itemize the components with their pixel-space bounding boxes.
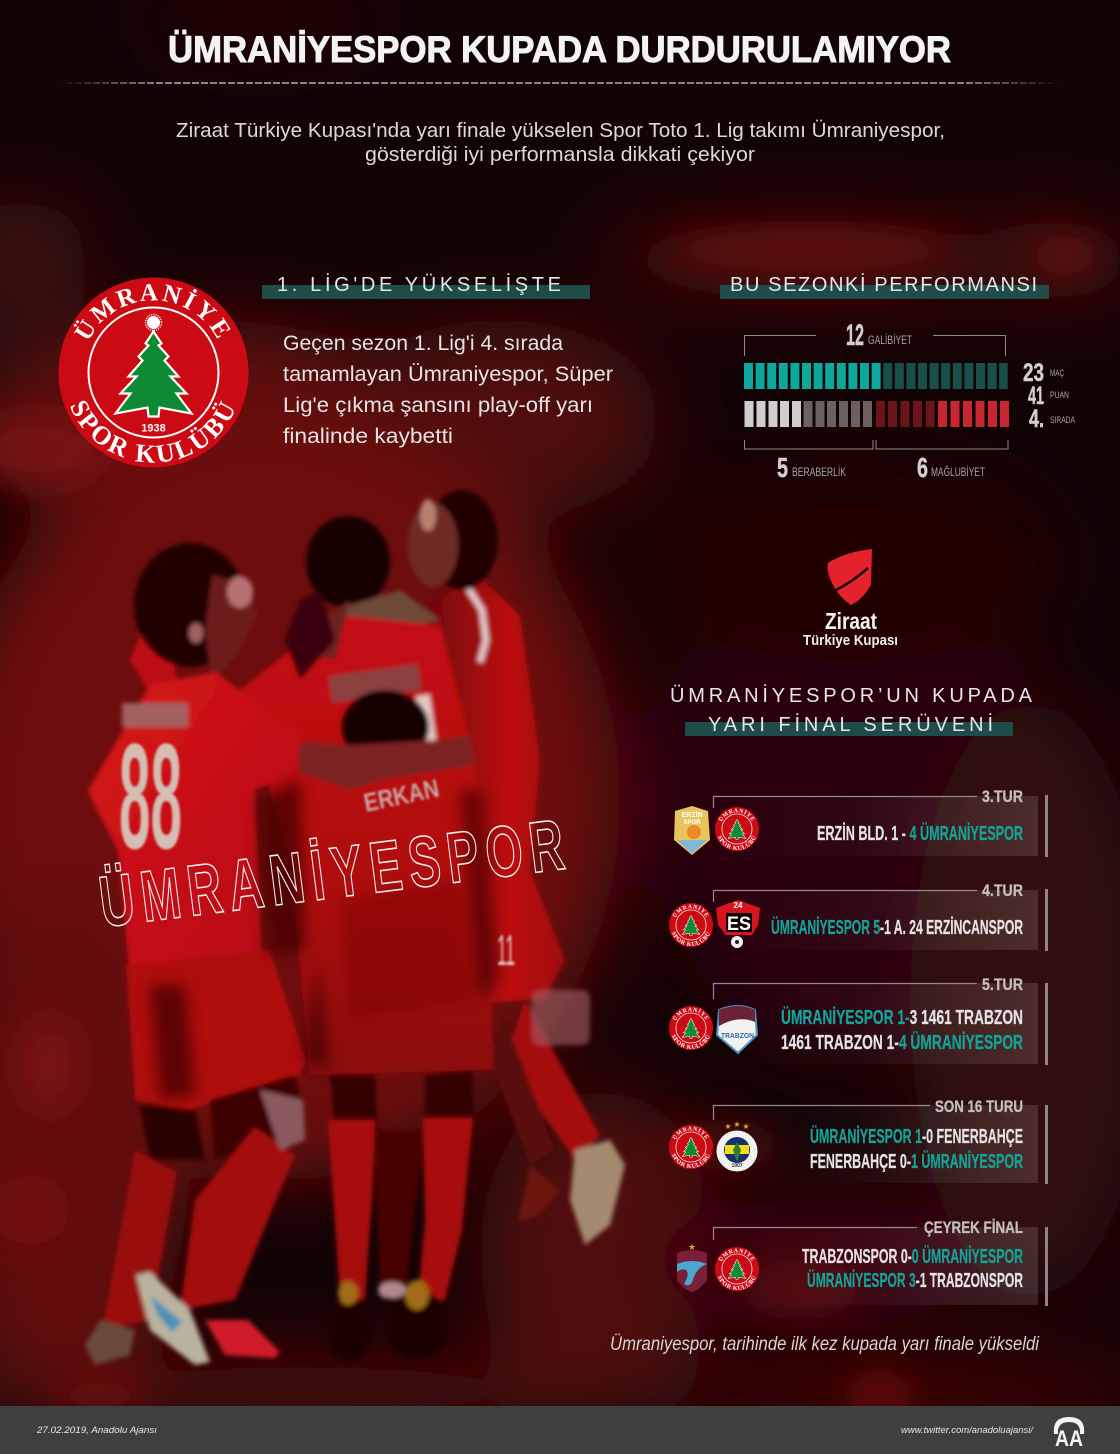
- totals: [1023, 359, 1075, 433]
- icon: Ümraniye crest: ÜMRANİYE: [718, 1248, 755, 1262]
- body text: finalinde kaybetti: [283, 425, 453, 448]
- panel: Son 16 Turu: [669, 1097, 1048, 1184]
- icon: Fenerbahçe crest: [716, 1120, 758, 1172]
- icon: Erzin Spor crest: ERZİN: [682, 811, 702, 819]
- right player: [408, 490, 625, 1245]
- icon: 1461 Trabzon crest: [717, 1006, 757, 1053]
- logo: Ziraat Türkiye Kupası: [803, 549, 898, 649]
- label: 6 losses: MAĞLUBİYET: [931, 464, 985, 479]
- section: season performance: BU SEZONKİ PERFORMANSI: [730, 273, 1037, 296]
- footer: [0, 1406, 1120, 1454]
- body text: [283, 332, 613, 448]
- icon: Ümraniye crest: [669, 1125, 713, 1169]
- intro text: [176, 120, 945, 166]
- section heading: cup journey: YARI FİNAL SERÜVENİ: [708, 713, 993, 736]
- scores: [781, 1006, 1023, 1054]
- scores: ÜMRANİYESPOR 1-3 1461 TRABZON: [781, 1006, 1023, 1029]
- bars: results: [744, 401, 1009, 427]
- icon: Fenerbahçe crest: 1907: [731, 1163, 743, 1169]
- totals: 41: [1028, 382, 1044, 410]
- icon: Ümraniye crest: ÜMRANİYE: [672, 1008, 709, 1020]
- icon: Ümraniye crest: ÜMRANİYE: [672, 1126, 709, 1140]
- scores: TRABZONSPOR 0-0 ÜMRANİYESPOR: [802, 1245, 1023, 1268]
- icon: Ümraniye crest: ÜMRANİYE: [672, 904, 709, 918]
- score: ERZİN BLD. 1 - 4 ÜMRANİYESPOR: [817, 822, 1023, 845]
- section heading: cup journey: ÜMRANİYESPOR’UN KUPADA: [670, 684, 1033, 707]
- scores: [802, 1245, 1023, 1292]
- icon: Ümraniye crest: SPOR KULÜBÜ: [672, 1154, 710, 1168]
- icon: stars: ★: [724, 1122, 732, 1131]
- bracket: wins: [744, 336, 1006, 356]
- label: 12 wins: 12: [846, 319, 864, 352]
- totals: MAÇ: [1050, 368, 1064, 378]
- heading bar: [262, 285, 590, 299]
- panel: 3. Tur: 3.TUR: [982, 787, 1023, 806]
- icon: Ümraniye crest: SPOR KULÜBÜ: [718, 1276, 756, 1290]
- photo: players celebrating: 11: [497, 926, 515, 975]
- outlined team name: ÜMRANİYESPOR: [95, 804, 569, 942]
- icon: Anadolu Ajansı logo: AA: [1055, 1426, 1083, 1451]
- score: ÜMRANİYESPOR 5-1 A. 24 ERZİNCANSPOR: [771, 916, 1023, 939]
- icon: 24 Erzincanspor crest: [716, 900, 760, 948]
- body text: tamamlayan Ümraniyespor, Süper: [283, 363, 613, 386]
- icon: 24 Erzincanspor crest: 24: [734, 901, 743, 910]
- icon: Ümraniye crest: SPOR KULÜBÜ: [672, 1034, 710, 1049]
- icon: Ümraniye crest: [715, 807, 759, 851]
- scores: ÜMRANİYESPOR 3-1 TRABZONSPOR: [807, 1269, 1023, 1292]
- totals: SIRADA: [1050, 415, 1075, 425]
- intro text: gösterdiği iyi performansla dikkati çekiyor: [365, 144, 755, 166]
- scores: [810, 1125, 1023, 1173]
- section heading: cup journey: [670, 684, 1033, 736]
- section: 1. Lig'de yükselişte: [262, 273, 613, 448]
- body text: Geçen sezon 1. Lig'i 4. sırada: [283, 332, 563, 355]
- panel: Çeyrek Final: ÇEYREK FİNAL: [924, 1218, 1023, 1237]
- icon: Ümraniye crest: [669, 903, 713, 947]
- intro text: Ziraat Türkiye Kupası'nda yarı finale yükselen Spor Toto 1. Lig takımı Ümraniyespor,: [176, 120, 945, 142]
- club logo: Ümraniye: ÜMRANİYE: [74, 284, 230, 338]
- panel: 3. Tur: [674, 787, 1048, 857]
- scores: 1461 TRABZON 1-4 ÜMRANİYESPOR: [781, 1031, 1023, 1054]
- bracket: draws and losses: [744, 440, 1008, 449]
- icon: stars: [724, 1120, 750, 1131]
- panel: 5. Tur: 5.TUR: [982, 975, 1023, 994]
- shirt name: ERKAN: [361, 773, 442, 818]
- middle player: [240, 516, 493, 1362]
- panel: Son 16 Turu: SON 16 TURU: [935, 1097, 1023, 1116]
- icon: 1461 Trabzon crest: TRABZON: [721, 1033, 754, 1040]
- label: 5 draws: 5: [777, 452, 788, 483]
- footer: 27.02.2019, Anadolu Ajansı: [36, 1425, 157, 1436]
- icon: Trabzonspor crest: ★: [688, 1242, 696, 1252]
- icon: Anadolu Ajansı logo: [1054, 1417, 1084, 1451]
- section: 1. Lig'de yükselişte: 1. LİG'DE YÜKSELİŞTE: [277, 273, 561, 296]
- panel: 4. Tur: [669, 881, 1048, 951]
- icon: Ümraniye crest: ÜMRANİYE: [718, 808, 755, 822]
- bars: matches: [744, 363, 1008, 389]
- icon: Ümraniye crest: SPOR KULÜBÜ: [672, 932, 710, 946]
- icon: Trabzonspor crest: [677, 1242, 707, 1292]
- totals: 23: [1023, 359, 1044, 387]
- photo: players celebrating: 88: [119, 712, 182, 880]
- icon: stars: ★: [733, 1120, 741, 1129]
- totals: 4.: [1029, 405, 1044, 433]
- icon: Ümraniye crest: [668, 1006, 714, 1050]
- icon: trophy: [828, 549, 872, 605]
- logo: Ziraat Türkiye Kupası: Ziraat: [825, 608, 877, 634]
- panel: 4. Tur: 4.TUR: [982, 881, 1023, 900]
- label: 12 wins: GALİBİYET: [868, 333, 912, 347]
- title: ÜMRANİYESPOR KUPADA DURDURULAMIYOR: [168, 29, 951, 70]
- club logo: Ümraniye: SPOR KULÜBÜ: [70, 400, 234, 463]
- heading bar: [720, 285, 1049, 299]
- left player: [85, 543, 475, 1365]
- panel: Çeyrek Final: [677, 1218, 1048, 1306]
- panel: 5. Tur: [668, 975, 1048, 1065]
- label: 12 wins: [846, 319, 912, 352]
- icon: stars: ★: [742, 1122, 750, 1131]
- label: 5 draws: BERABERLİK: [792, 465, 846, 479]
- icon: Erzin Spor crest: [674, 806, 710, 855]
- club logo: Ümraniye: 1938: [141, 422, 166, 434]
- icon: Ümraniye crest: SPOR KULÜBÜ: [718, 836, 756, 850]
- body shadows: [150, 780, 498, 1100]
- icon: Erzin Spor crest: SPOR: [683, 820, 701, 826]
- footer: www.twitter.com/anadoluajansi/: [901, 1425, 1034, 1436]
- icon: Ümraniye crest: [714, 1247, 759, 1291]
- label: 6 losses: [917, 452, 985, 483]
- label: 6 losses: 6: [917, 452, 928, 483]
- icon: 24 Erzincanspor crest: ES: [727, 914, 751, 935]
- totals: PUAN: [1050, 390, 1069, 400]
- photo: players celebrating: [85, 490, 625, 1365]
- closing note: Ümraniyespor, tarihinde ilk kez kupada yarı finale yükseldi: [610, 1334, 1040, 1355]
- section: season performance: [720, 273, 1075, 483]
- scores: FENERBAHÇE 0-1 ÜMRANİYESPOR: [810, 1150, 1023, 1173]
- club logo: Ümraniye: [58, 278, 248, 468]
- logo: Ziraat Türkiye Kupası: Türkiye Kupası: [803, 632, 898, 649]
- body text: Lig'e çıkma şansını play-off yarı: [283, 394, 593, 417]
- label: 5 draws: [777, 452, 846, 483]
- scores: ÜMRANİYESPOR 1-0 FENERBAHÇE: [810, 1125, 1023, 1148]
